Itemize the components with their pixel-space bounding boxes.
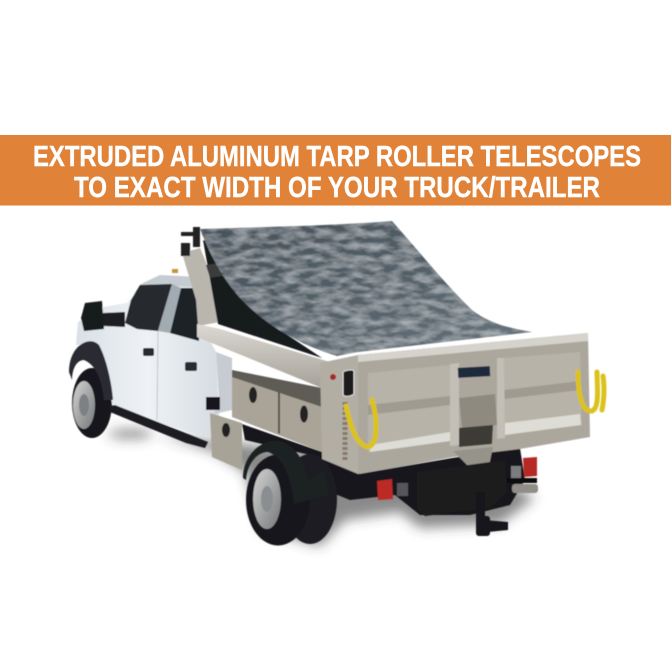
ground shadow bbox=[108, 429, 535, 546]
side rail bbox=[197, 324, 330, 388]
roller end bracket bbox=[181, 227, 200, 256]
spreader chute bbox=[453, 447, 493, 471]
side body panel behind boxes bbox=[232, 370, 322, 408]
cab back gap bbox=[214, 352, 232, 414]
left tail light bbox=[377, 479, 393, 500]
rear fender bbox=[243, 441, 329, 504]
tow hitch bbox=[476, 492, 508, 536]
front fender flare bbox=[69, 341, 113, 400]
rear window bbox=[170, 288, 199, 341]
spreader opening bbox=[459, 394, 497, 428]
rear body side post bbox=[320, 355, 358, 474]
dump body dark interior bbox=[203, 240, 322, 358]
rear wheels bbox=[246, 454, 337, 546]
hitch block bbox=[417, 460, 507, 516]
rear tailgate bbox=[358, 333, 590, 474]
right tail light bbox=[523, 457, 537, 477]
logo plate bbox=[458, 366, 490, 378]
under body chassis bbox=[242, 424, 525, 515]
truck cab bbox=[69, 269, 219, 448]
centre posts bbox=[450, 363, 459, 446]
running board bbox=[110, 405, 208, 448]
lower side toolbox bbox=[210, 413, 242, 470]
door seam bbox=[157, 331, 158, 420]
chain left bbox=[342, 402, 348, 460]
dark latch box bbox=[206, 397, 220, 410]
wing mirror bbox=[81, 301, 104, 331]
headache rack post bbox=[182, 248, 220, 326]
tarp bbox=[200, 221, 532, 356]
dump truck bbox=[69, 221, 604, 546]
upper side toolbox bbox=[232, 377, 322, 452]
hitch bar and exhaust bbox=[507, 478, 538, 493]
tailgate right panel bbox=[504, 352, 582, 435]
door handles bbox=[143, 348, 154, 356]
yellow strap left bbox=[346, 400, 376, 447]
yellow strap right bbox=[578, 372, 604, 411]
icon: front wheel bbox=[72, 368, 112, 438]
front window bbox=[125, 284, 172, 331]
orange banner bbox=[0, 135, 671, 206]
door pillar bbox=[158, 284, 181, 333]
amber marker bbox=[172, 269, 178, 273]
roof shade bbox=[140, 275, 198, 287]
tailgate left panel bbox=[368, 365, 450, 452]
